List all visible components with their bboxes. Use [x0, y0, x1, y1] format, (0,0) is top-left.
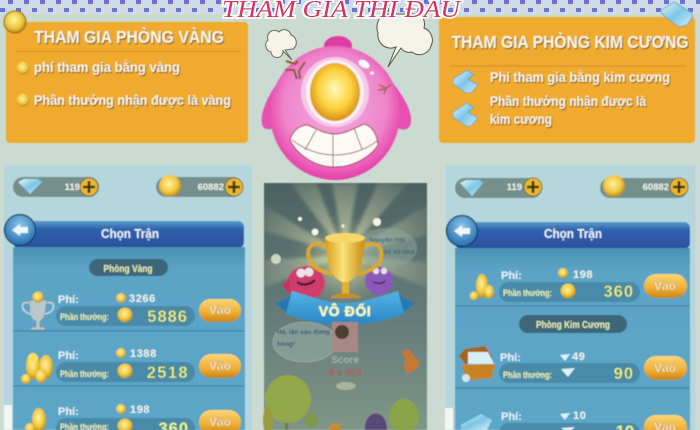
- row 10: [461, 410, 687, 430]
- dotted top band: [0, 0, 700, 14]
- row 10: 10: [573, 410, 586, 422]
- row 49: 90: [614, 365, 634, 383]
- icon: gold coin corner: [4, 11, 26, 33]
- orange creature: [329, 423, 341, 430]
- blue ribbon: [275, 291, 415, 325]
- label: vô đối: VÔ ĐỐI: [319, 302, 371, 319]
- icon: bullet diamond 2: [453, 103, 478, 126]
- monster eye: [301, 57, 369, 127]
- player score: Score: [331, 355, 359, 366]
- monster highlights: [357, 58, 371, 70]
- section label: phòng kim cương: Phòng Kim Cương: [536, 319, 610, 331]
- player avatar: [332, 322, 358, 352]
- pill: diamonds: [13, 177, 99, 197]
- back button: [4, 214, 36, 246]
- row 49: Phần thưởng:: [503, 370, 552, 381]
- pill: diamonds: 119: [507, 182, 522, 193]
- speech bubble top right: [357, 228, 417, 268]
- illustration: pink monster: [262, 36, 411, 180]
- speech bubble top right: Nguyên Hội: [369, 237, 405, 244]
- purple monster: [365, 267, 393, 295]
- icon: bullet coin 2: [16, 94, 30, 106]
- row 3266: Phí:: [58, 294, 79, 306]
- heading: gold room: THAM GIA PHÒNG VÀNG: [34, 26, 224, 47]
- purple creature: [365, 413, 387, 430]
- icon: speech cloud right: [377, 14, 432, 67]
- row 198: Vào: [654, 279, 676, 293]
- header: chọn trận: Chọn Trận: [101, 226, 159, 241]
- monster knob: [324, 36, 352, 56]
- pill: diamonds: 119: [65, 182, 80, 193]
- pill: diamonds: [455, 178, 542, 198]
- icon: coin stack: [470, 274, 494, 300]
- speech bubble bottom left: hòng!: [277, 341, 295, 348]
- row 1388: 2518: [147, 364, 189, 382]
- icon: diamond pile: [461, 414, 492, 430]
- row 198: 360: [603, 283, 634, 301]
- speech bubble top right: thi Xê Nhé: [383, 249, 415, 256]
- list panel: [13, 247, 245, 430]
- light rays: [264, 183, 427, 288]
- panel: right phone screen: [445, 165, 695, 430]
- player score: 8 x 453: [328, 368, 362, 379]
- row 49: Vào: [654, 361, 676, 375]
- fox creature: [401, 349, 420, 374]
- row 198: [455, 268, 690, 306]
- player score: [328, 355, 362, 379]
- icon: speech cloud left: [266, 30, 296, 60]
- row 198: Phần thưởng:: [503, 288, 552, 299]
- row 1388: Vào: [209, 359, 231, 373]
- header: chọn trận: [455, 222, 690, 249]
- text: gold reward: Phần thưởng nhận được là vàng: [34, 93, 231, 108]
- row 198: 198: [130, 404, 150, 416]
- pill: coins: 60882: [643, 182, 669, 193]
- speech bubble bottom left: [273, 322, 337, 362]
- header: chọn trận: Chọn Trận: [544, 226, 602, 241]
- icon: small coin stack: [25, 408, 46, 430]
- green tree right: [389, 399, 419, 430]
- pill: coins: [600, 175, 688, 198]
- row 3266: 3266: [129, 293, 156, 305]
- icon: bullet coin 1: [16, 62, 30, 74]
- pink monster: [282, 266, 325, 300]
- row 198: Vào: [209, 415, 231, 429]
- row 49: Phí:: [500, 352, 521, 364]
- monster anger marks: [285, 61, 305, 79]
- gold trophy: [308, 233, 381, 298]
- row 1388: 1388: [130, 348, 157, 360]
- row 10: Phí:: [501, 411, 522, 423]
- green tree left: [263, 375, 318, 430]
- row 198: [25, 404, 241, 430]
- row 1388: [13, 348, 245, 386]
- row 3266: 5886: [147, 308, 188, 326]
- row 1388: Phí:: [58, 350, 79, 362]
- pill: coins: 60882: [198, 182, 224, 193]
- row 198: Phí:: [501, 270, 522, 282]
- header: chọn trận: [13, 221, 244, 248]
- icon: gold coin stacks: [21, 353, 53, 384]
- panel: gold room: [4, 11, 248, 143]
- small pill: [336, 382, 356, 390]
- panel: diamond room: [439, 2, 695, 143]
- icon: diamond corner: [660, 2, 692, 27]
- monster body: [270, 46, 400, 180]
- text: gold fee: phí tham gia bằng vàng: [34, 60, 180, 75]
- back button: [446, 216, 478, 246]
- pill: coins: [156, 175, 243, 197]
- panel: left phone screen: [4, 165, 252, 430]
- row 198: 198: [573, 269, 593, 281]
- speech bubble bottom left: Hà, lần sau đừng: [277, 327, 330, 336]
- icon: treasure chest: [459, 346, 495, 382]
- row 49: 49: [572, 351, 585, 363]
- row 49: [455, 346, 690, 388]
- section label: phòng vàng: Phòng Vàng: [104, 263, 152, 275]
- icon: silver trophy: [22, 292, 54, 330]
- stars: [271, 217, 381, 264]
- row 3266: Phần thưởng:: [60, 312, 109, 323]
- section label: phòng vàng: [89, 259, 168, 276]
- text: diamond reward: kim cương: [490, 112, 552, 127]
- row 1388: Phần thưởng:: [60, 369, 109, 380]
- monster teeth: [290, 124, 378, 167]
- panel: centre phone screen: [263, 183, 427, 430]
- text: diamond fee: Phí tham gia bằng kim cương: [490, 70, 670, 85]
- monster fins: [262, 80, 280, 129]
- row 3266: Vào: [209, 303, 231, 317]
- row 198: Phí:: [58, 406, 79, 418]
- section label: phòng kim cương: [519, 315, 627, 333]
- row 3266: [13, 292, 245, 331]
- icon: bullet diamond 1: [453, 70, 478, 93]
- list panel: [455, 248, 690, 430]
- text: diamond reward: Phần thưởng nhận được là: [490, 94, 646, 109]
